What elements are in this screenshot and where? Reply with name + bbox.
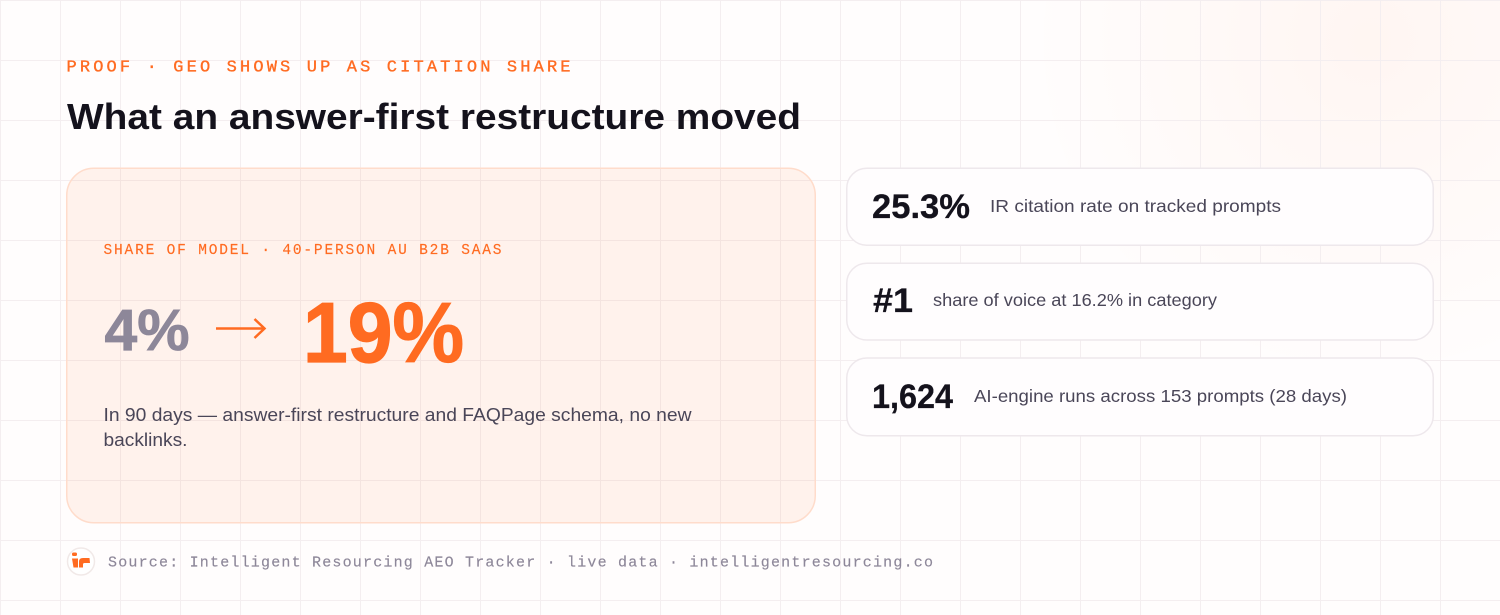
after value: 19%: [303, 286, 464, 381]
description: backlinks.: [104, 430, 188, 450]
stat card: share of voice: [847, 263, 1433, 340]
stat card: citation rate: [847, 168, 1433, 245]
arrow: [216, 319, 264, 338]
source line: Source: Intelligent Resourcing AEO Tracker · live data · intelligentresourcing.co: [108, 554, 933, 572]
stat value: #1: [873, 282, 913, 320]
before value: 4%: [104, 298, 190, 363]
title: What an answer-first restructure moved: [67, 96, 801, 137]
description: In 90 days — answer-first restructure and FAQPage schema, no new: [104, 405, 693, 425]
panel: share of model: [67, 168, 815, 523]
stat value: 25.3%: [872, 188, 970, 226]
eyebrow: PROOF · GEO SHOWS UP AS CITATION SHARE: [66, 58, 571, 78]
stat value: 1,624: [872, 378, 953, 416]
stat label: IR citation rate on tracked prompts: [990, 196, 1281, 216]
panel label: SHARE OF MODEL · 40-PERSON AU B2B SAAS: [104, 243, 502, 259]
icon: logo: [68, 548, 94, 575]
description: [104, 405, 693, 450]
stat card: engine runs: [847, 358, 1433, 436]
stat label: AI-engine runs across 153 prompts (28 days): [974, 386, 1347, 406]
stat label: share of voice at 16.2% in category: [933, 290, 1217, 310]
